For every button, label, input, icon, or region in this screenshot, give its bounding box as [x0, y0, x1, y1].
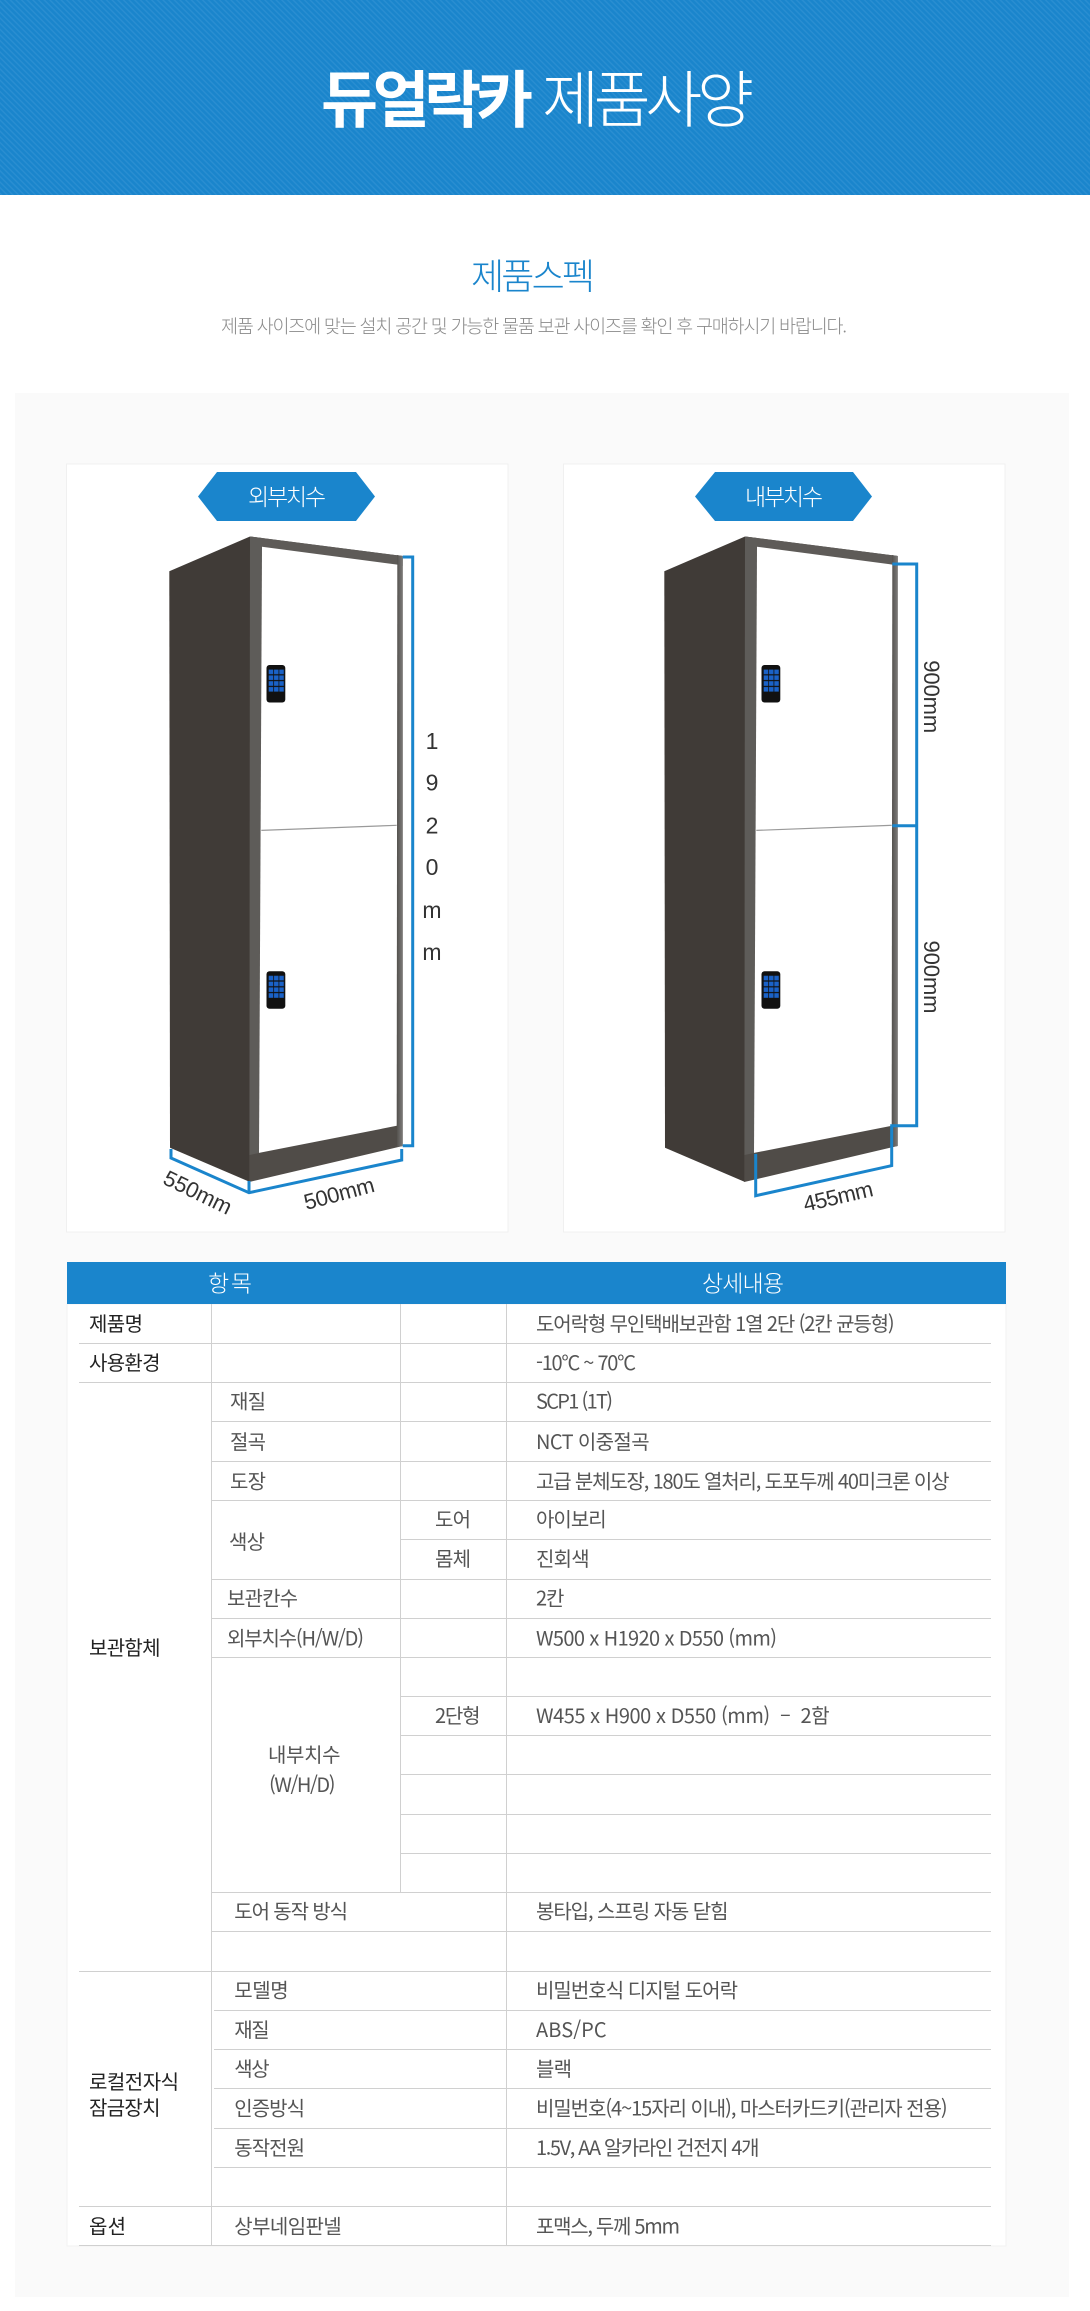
badge: exterior dimensions: [198, 472, 375, 521]
row: color: 몸체: [435, 1543, 471, 1572]
height label: [422, 728, 442, 965]
row: compartments: [227, 1582, 564, 1612]
row: interior size: 내부치수: [268, 1739, 340, 1768]
row: coating: 도장: [230, 1466, 266, 1494]
row: power: 1.5V, AA 알카라인 건전지 4개: [536, 2132, 760, 2161]
row: color: 진회색: [536, 1543, 590, 1572]
group label: local electronic lock: 로컬전자식: [89, 2066, 179, 2095]
row: bending: NCT 이중절곡: [536, 1426, 650, 1455]
badge: interior dimensions: 내부치수: [745, 478, 823, 512]
row: exterior size: W500 x H1920 x D550 (mm): [536, 1622, 777, 1652]
row: environment: 사용환경: [89, 1347, 160, 1376]
height label: 0: [426, 854, 438, 880]
row: bending: [230, 1426, 650, 1455]
row: power: 동작전원: [234, 2132, 305, 2161]
row: color: 색상: [229, 1526, 265, 1555]
row: bending: 절곡: [230, 1426, 266, 1455]
height label: 1: [426, 728, 438, 754]
row: power: [234, 2132, 760, 2161]
width label: 455mm: [801, 1176, 876, 1217]
cabinet illustration: [664, 536, 898, 1182]
row: door operation: [234, 1896, 729, 1924]
base dimension lines: [171, 1149, 402, 1193]
header banner: [0, 0, 1090, 195]
row: lock color: 색상: [234, 2053, 270, 2082]
height label: 2: [426, 812, 438, 838]
row: color: 아이보리: [536, 1504, 607, 1532]
table header: 항목: [208, 1264, 252, 1298]
row: lock material: ABS/PC: [536, 2014, 607, 2043]
row: lock material: [234, 2014, 607, 2043]
row: option: 상부네임판넬: [234, 2210, 342, 2240]
row: product name: 제품명: [89, 1308, 143, 1337]
title: 듀얼락카: [321, 50, 533, 140]
title: 제품사양: [542, 50, 754, 140]
table header: 상세내용: [702, 1264, 784, 1298]
row: door operation: 봉타입, 스프링 자동 닫힘: [536, 1896, 728, 1924]
row: model name: [234, 1974, 738, 2004]
badge: interior dimensions: [695, 472, 872, 521]
keypad upper: [266, 665, 285, 702]
cabinet doors: [754, 547, 892, 1153]
panel: interior dimensions: [564, 464, 1005, 1232]
row: environment: -10°C ~ 70°C: [536, 1347, 636, 1376]
row: lock color: [234, 2053, 572, 2082]
row: lock color: 블랙: [536, 2053, 572, 2082]
row: color: 도어: [435, 1504, 471, 1532]
row: option: 옵션: [89, 2210, 126, 2240]
specification table: [67, 1262, 1006, 2246]
table header: [67, 1262, 1006, 1304]
row: authentication: 비밀번호(4~15자리 이내), 마스터카드키(관리자 전용): [536, 2092, 948, 2122]
section heading: 제품스펙: [471, 248, 595, 300]
keypad lower: [762, 971, 780, 1009]
keypad upper: [762, 665, 780, 702]
row: door operation: 도어 동작 방식: [234, 1896, 348, 1924]
row: material: [230, 1386, 613, 1414]
row: product name: 도어락형 무인택배보관함 1열 2단 (2칸 균등형): [536, 1308, 895, 1337]
row: material: SCP1 (1T): [536, 1386, 613, 1414]
lower height label: 900mm: [919, 940, 944, 1014]
row: model name: 비밀번호식 디지털 도어락: [536, 1974, 738, 2004]
row: compartments: 보관칸수: [227, 1582, 298, 1612]
section description: 제품 사이즈에 맞는 설치 공간 및 가능한 물품 보관 사이즈를 확인 후 구매하시기 바랍니다.: [221, 313, 847, 339]
badge: exterior dimensions: 외부치수: [248, 478, 326, 512]
row: compartments: 2칸: [536, 1582, 564, 1612]
row: coating: 고급 분체도장, 180도 열처리, 도포두께 40미크론 이상: [536, 1466, 950, 1494]
row: color: [229, 1504, 607, 1572]
cabinet illustration: [169, 536, 403, 1182]
upper height label: 900mm: [919, 660, 944, 733]
cabinet doors: [259, 547, 397, 1153]
row: authentication: 인증방식: [234, 2092, 305, 2122]
group label: storage body: 보관함체: [89, 1632, 160, 1661]
row: lock material: 재질: [234, 2014, 270, 2043]
height label: 9: [426, 770, 438, 796]
row: material: 재질: [230, 1386, 266, 1414]
gray content panel: [15, 393, 1069, 2297]
row: coating: [230, 1466, 950, 1494]
panel: exterior dimensions: [66, 464, 508, 1232]
title: [321, 50, 754, 140]
height label: m: [422, 897, 442, 923]
row: environment: [89, 1347, 636, 1376]
group label: local electronic lock: [89, 2066, 179, 2121]
row: exterior size: 외부치수(H/W/D): [227, 1622, 364, 1652]
row: model name: 모델명: [234, 1974, 289, 2004]
interior dimension lines: [756, 564, 917, 1196]
row: option: [89, 2210, 680, 2240]
row: interior size: [268, 1700, 830, 1798]
row: option: 포맥스, 두께 5mm: [536, 2210, 680, 2240]
row: interior size: W455 x H900 x D550 (mm) – 2함: [536, 1700, 830, 1729]
row: interior size: 2단형: [435, 1700, 480, 1729]
row: product name: [89, 1308, 895, 1337]
row: interior size: (W/H/D): [269, 1769, 336, 1798]
row: authentication: [234, 2092, 948, 2122]
height label: m: [422, 939, 442, 965]
depth label: 550mm: [159, 1165, 236, 1220]
height dimension line: [403, 557, 413, 1146]
row: exterior size: [227, 1622, 777, 1652]
width label: 500mm: [301, 1172, 377, 1215]
group label: local electronic lock: 잠금장치: [89, 2092, 160, 2121]
keypad lower: [266, 971, 285, 1009]
